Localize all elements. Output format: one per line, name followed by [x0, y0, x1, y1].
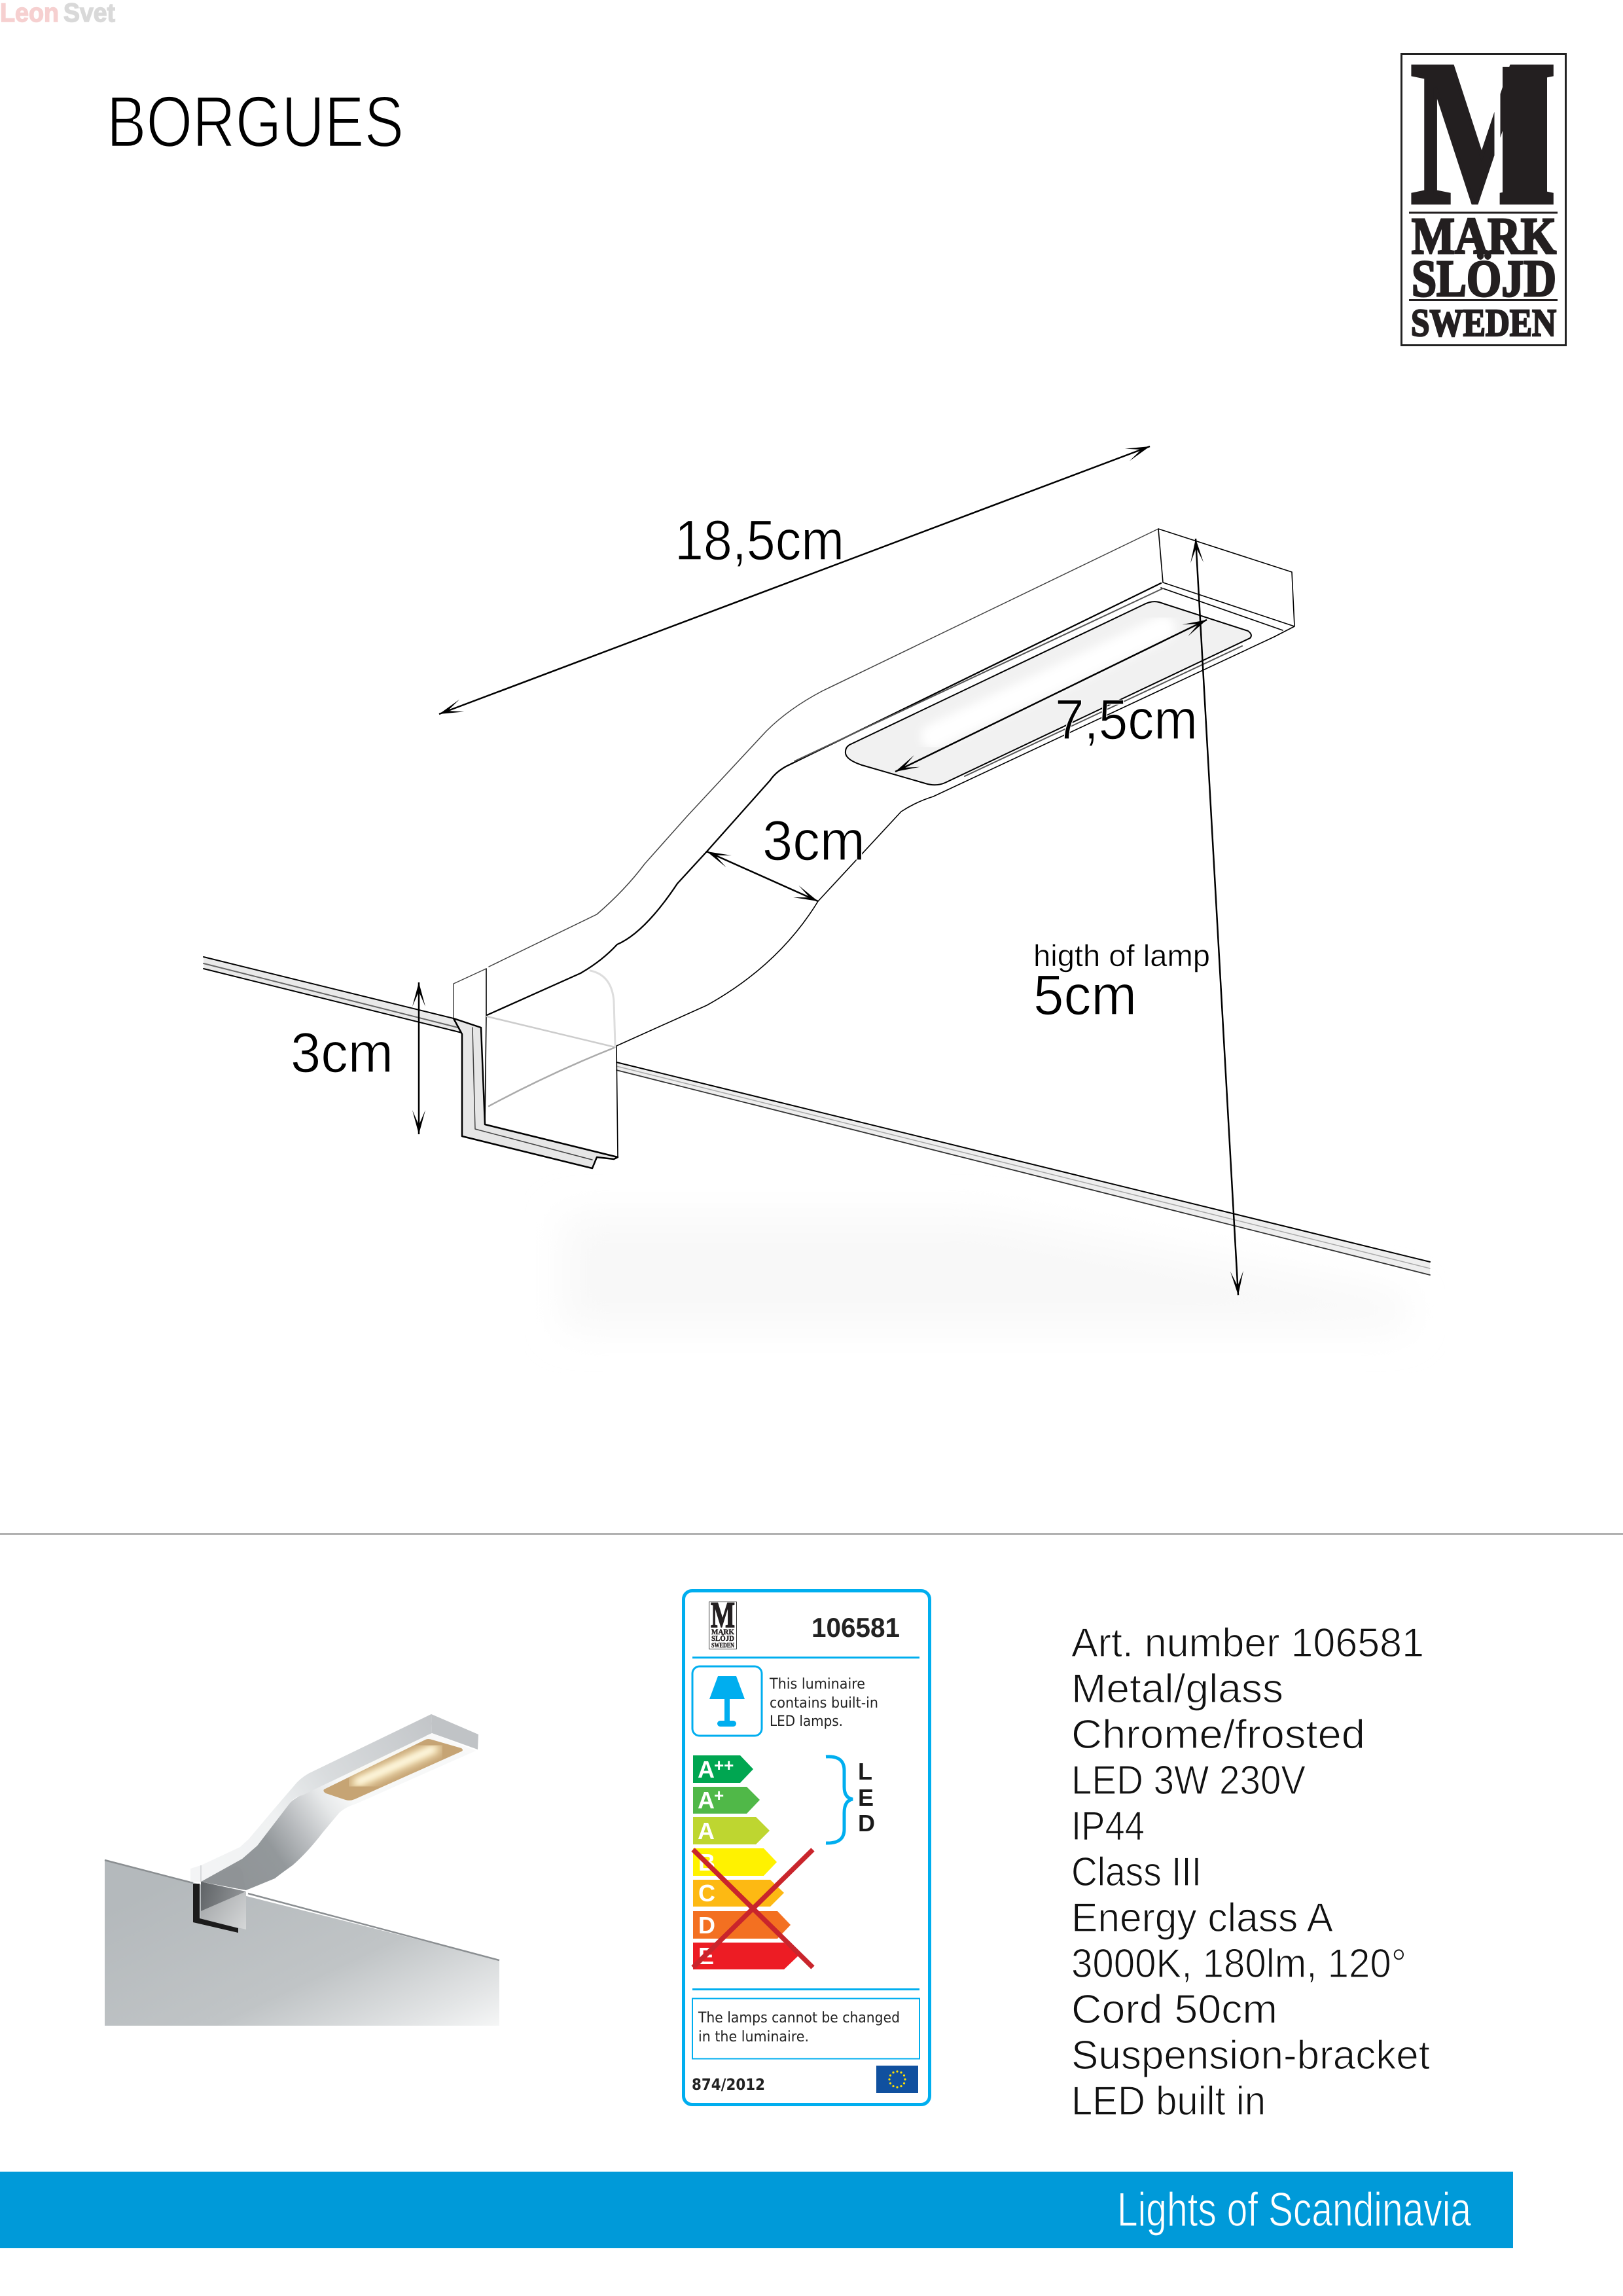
small logo: M: [711, 1595, 735, 1636]
LED letters: E: [858, 1784, 874, 1811]
specification list: [1071, 1621, 1430, 2124]
title: BORGUES: [107, 82, 404, 162]
logo: Mark Slöjd Sweden: SLÖJD: [1412, 251, 1556, 308]
bracket lip: [201, 1866, 246, 1890]
specification list: Energy class A: [1071, 1895, 1334, 1941]
bracket: [485, 969, 618, 1157]
energy bars: +: [714, 1785, 724, 1805]
energy bars: A: [698, 1787, 715, 1814]
arrow: 7,5cm: [895, 620, 1207, 772]
lamp icon: [692, 1666, 762, 1736]
small logo: [709, 1595, 737, 1649]
recess edges: [794, 588, 1242, 776]
glass shelf left: [204, 957, 463, 1034]
luminaire text: [769, 1676, 878, 1730]
bracket upper chrome: [201, 1882, 246, 1911]
LED glow: [357, 1749, 435, 1783]
LED letters: D: [858, 1810, 875, 1837]
glass shelf right: [616, 1062, 1430, 1275]
technical line drawing of lamp: [204, 529, 1430, 1329]
specification list: Chrome/frosted: [1071, 1712, 1365, 1757]
energy bars: ++: [714, 1755, 734, 1775]
clip slot: [193, 1884, 238, 1933]
luminaire text: contains built-in: [770, 1695, 878, 1712]
specification list: LED built in: [1071, 2079, 1266, 2124]
arm top surface: [190, 1714, 432, 1882]
dimension labels: 3cm: [762, 810, 865, 872]
clip channel: [454, 1018, 618, 1168]
energy bars: A: [698, 1756, 715, 1783]
specification list: Suspension-bracket: [1071, 2033, 1430, 2078]
end cap: [1158, 529, 1294, 637]
dimension labels: higth of lamp: [1033, 939, 1210, 973]
dimension labels: 3cm: [291, 1022, 393, 1085]
arrow: 3cm clip: [418, 982, 419, 1134]
arm lower edge: [616, 637, 1274, 1046]
LED letters: L: [858, 1758, 872, 1785]
LED panel: [846, 601, 1251, 785]
bracket lower chrome: [201, 1892, 246, 1929]
specification list: IP44: [1071, 1804, 1145, 1849]
logo: Mark Slöjd Sweden: M: [1410, 18, 1556, 247]
regulation number: 874/2012: [692, 2075, 765, 2094]
logo: Mark Slöjd Sweden: [1402, 18, 1565, 346]
watermark: [0, 0, 115, 27]
energy label: [683, 1590, 929, 2105]
arrow: height: [1196, 539, 1238, 1295]
specification list: Metal/glass: [1071, 1666, 1283, 1712]
LED panel: [323, 1739, 463, 1801]
dimension labels: 5cm: [1033, 964, 1137, 1027]
red cross: [693, 1850, 813, 1967]
specification list: LED 3W 230V: [1071, 1758, 1306, 1803]
white LED rim: [426, 1733, 476, 1754]
notice box: in the luminaire.: [698, 2029, 809, 2045]
logo: Mark Slöjd Sweden: MARK: [1412, 208, 1556, 265]
divider: [0, 1533, 1623, 1535]
arrow: 18,5cm: [439, 446, 1150, 714]
label frame: [683, 1590, 929, 2105]
energy bars: C: [698, 1880, 715, 1907]
small logo: SWEDEN: [711, 1642, 735, 1649]
small logo: MARK: [711, 1627, 735, 1636]
specification list: Art. number 106581: [1071, 1621, 1424, 1666]
specification list: Class III: [1071, 1850, 1202, 1895]
mirror: [105, 1860, 499, 2026]
energy bars: [693, 1755, 798, 1969]
energy bars: B: [698, 1849, 715, 1876]
footer bar: Lights of Scandinavia: [1117, 2183, 1471, 2236]
EU flag: [876, 2066, 918, 2093]
logo: Mark Slöjd Sweden: SWEDEN: [1411, 301, 1556, 344]
LED letters: [858, 1758, 875, 1837]
product photo: [105, 1714, 499, 2026]
dimension labels: 7,5cm: [1055, 689, 1198, 751]
arm outer thin outline: [454, 529, 1158, 1018]
article number: 106581: [812, 1612, 900, 1643]
footer bar: [0, 2172, 1513, 2248]
energy bars: E: [698, 1943, 714, 1969]
arm dark inner edge: [487, 583, 1161, 1015]
energy bars: A: [698, 1818, 715, 1844]
luminaire text: LED lamps.: [770, 1713, 843, 1730]
faint mirror texture: [563, 1217, 1407, 1329]
specification list: Cord 50cm: [1071, 1987, 1277, 2032]
panel glow: [933, 628, 1163, 736]
arrow: 3cm arm: [707, 852, 818, 901]
dimension labels: 18,5cm: [675, 509, 844, 572]
specification list: 3000K, 180lm, 120°: [1071, 1941, 1406, 1986]
notice box: The lamps cannot be changed: [698, 2010, 900, 2026]
luminaire text: This luminaire: [769, 1676, 865, 1693]
energy bars: D: [698, 1912, 715, 1939]
arm underside: [201, 1733, 476, 1890]
small logo: SLÖJD: [711, 1634, 734, 1643]
LED brace: [826, 1757, 853, 1843]
end cap: [431, 1714, 478, 1749]
dimension labels: [291, 509, 1210, 1085]
notice box: [692, 1999, 919, 2059]
